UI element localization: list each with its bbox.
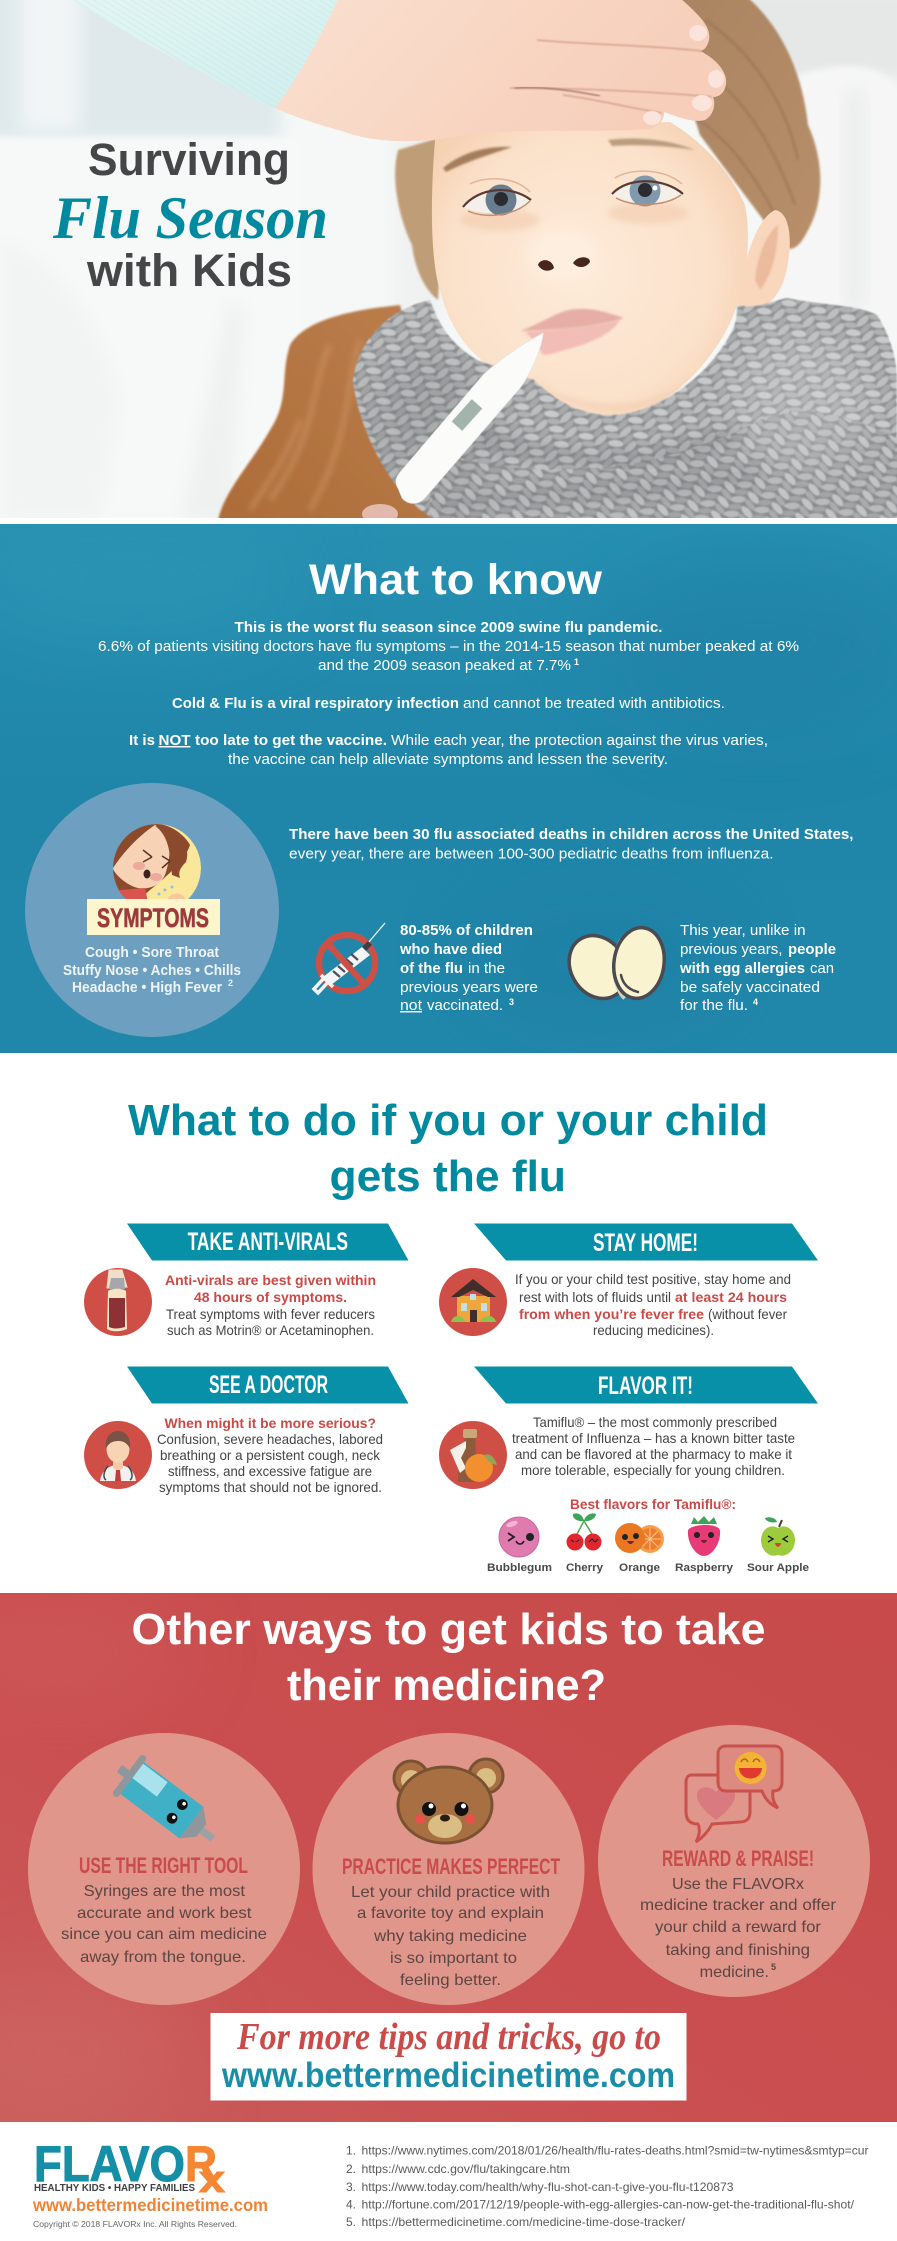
text block: see a doctor: When might it be more serious?	[164, 1415, 376, 1431]
hero title: Surviving	[88, 134, 290, 185]
flavor labels	[487, 1562, 809, 1574]
panel: reward and praise	[598, 1725, 870, 1997]
flavor labels: Bubblegum	[487, 1562, 552, 1574]
nose	[532, 234, 588, 272]
banner: see a doctor: SEE A DOCTOR	[209, 1371, 328, 1399]
text block: not vaccinated: in the	[468, 961, 505, 977]
banner: stay home: STAY HOME!	[593, 1229, 698, 1257]
body text: medicine tracker and offer	[640, 1897, 837, 1914]
text block: worst flu season: 1	[574, 657, 579, 667]
text block: worst flu season: 6.6% of patients visiting doctors have flu symptoms – in the 2014-15 season that number peaked at 6%	[98, 639, 799, 655]
text block: pediatric deaths: There have been 30 flu associated deaths in children across the United States,	[289, 827, 854, 843]
body text: Use the FLAVORx	[672, 1876, 804, 1893]
text block: not vaccinated: vaccinated.	[427, 998, 503, 1014]
parent's hand on forehead	[275, 0, 726, 141]
long ginger hair	[218, 305, 450, 520]
under-eye shadows	[460, 209, 540, 231]
icon: house	[439, 1268, 507, 1336]
knitted scarf	[353, 298, 897, 520]
symptoms label: SYMPTOMS	[97, 903, 209, 933]
icon: flavored bottle with orange	[439, 1421, 507, 1489]
panel: what to do	[84, 1096, 818, 1574]
symptoms list	[63, 945, 241, 996]
text block: vaccine: NOT	[158, 733, 191, 749]
parent's sleeve	[65, 0, 345, 108]
text block: cold and flu: Cold & Flu is a viral respiratory infection	[172, 696, 459, 712]
text block: egg allergies: people	[788, 942, 836, 958]
references list: https://www.nytimes.com/2018/01/26/health/flu-rates-deaths.html?smid=tw-nytimes&smtyp=cur	[362, 2144, 868, 2158]
flavor labels: Sour Apple	[747, 1562, 809, 1574]
references list: https://www.today.com/health/why-flu-shot-can-t-give-you-flu-t120873	[362, 2180, 734, 2194]
panel: right tool	[28, 1733, 300, 2005]
hair on the head	[682, 0, 822, 250]
text block: vaccine: the vaccine can help alleviate symptoms and lessen the severity.	[228, 752, 668, 768]
text block: cold and flu: and cannot be treated with antibiotics.	[463, 696, 725, 712]
body text: is so important to	[390, 1950, 517, 1967]
panel: symptoms circle	[25, 783, 279, 1037]
text block: see a doctor: symptoms that should not be ignored.	[159, 1479, 382, 1495]
skin at bottom edge	[362, 504, 398, 518]
title: USE THE RIGHT TOOL	[79, 1853, 248, 1878]
flavor labels: Orange	[619, 1562, 660, 1574]
heading	[128, 1096, 768, 1201]
symptoms label	[87, 899, 220, 935]
icon: doctor	[84, 1421, 152, 1489]
references list: 1.	[346, 2144, 356, 2158]
references list: 4.	[346, 2198, 356, 2212]
right eye	[612, 171, 683, 206]
body text: Syringes are the most	[84, 1883, 246, 1900]
flavor labels: Cherry	[566, 1562, 604, 1574]
heading: gets the flu	[330, 1152, 566, 1201]
text block: egg allergies: with egg allergies	[679, 961, 805, 977]
text block: not vaccinated: not	[400, 998, 422, 1014]
banner: flavor it	[474, 1366, 818, 1404]
banner: flavor it: FLAVOR IT!	[598, 1372, 693, 1400]
references list: 2.	[346, 2162, 356, 2176]
icon: syringe	[104, 1748, 228, 1859]
symptoms list: 2	[228, 978, 233, 988]
icon: sour apple	[761, 1517, 795, 1556]
icon: teddy bear	[394, 1759, 503, 1843]
left eye	[463, 179, 531, 216]
text block: not vaccinated: 3	[509, 997, 514, 1007]
heading: What to do if you or your child	[128, 1096, 768, 1145]
hero title: with Kids	[86, 245, 292, 296]
icon: crossed-out syringe	[314, 923, 385, 993]
callout: more tips: www.bettermedicinetime.com	[221, 2056, 675, 2095]
text block: worst flu season: This is the worst flu season since 2009 swine flu pandemic.	[234, 620, 662, 636]
text block: anti-virals: Treat symptoms with fever reducers	[166, 1306, 375, 1322]
text block: anti-virals	[165, 1272, 376, 1338]
text block: not vaccinated: 80-85% of children	[400, 923, 533, 939]
callout: more tips	[210, 2013, 686, 2100]
text block: anti-virals: such as Motrin® or Acetaminophen.	[167, 1322, 374, 1338]
logo: FLAVORx: HEALTHY KIDS • HAPPY FAMILIES	[34, 2182, 195, 2194]
text block: not vaccinated: previous years were	[400, 980, 538, 996]
references list: https://bettermedicinetime.com/medicine-time-dose-tracker/	[362, 2215, 686, 2229]
panel: practice makes perfect	[312, 1733, 584, 2005]
text block: pediatric deaths	[289, 827, 854, 862]
icon: medicine bottle	[84, 1268, 152, 1336]
icon: cherry	[566, 1513, 602, 1550]
body text	[351, 1884, 550, 1989]
text block: flavor it: treatment of Influenza – has a known bitter taste	[512, 1430, 795, 1446]
symptoms list: Headache • High Fever	[72, 980, 222, 996]
text block: worst flu season: and the 2009 season peaked at 7.7%	[318, 658, 571, 674]
text block: stay home: reducing medicines).	[593, 1322, 714, 1338]
body text: why taking medicine	[373, 1928, 527, 1945]
body text: away from the tongue.	[80, 1949, 246, 1966]
text block: vaccine: too late to get the vaccine.	[195, 733, 387, 749]
heading: their medicine?	[287, 1661, 606, 1710]
text block: flavor it: and can be flavored at the pharmacy to make it	[515, 1446, 792, 1462]
text block: not vaccinated: who have died	[399, 942, 502, 958]
body text: your child a reward for	[655, 1919, 822, 1936]
text block: egg allergies: This year, unlike in	[680, 923, 806, 939]
banner: stay home	[474, 1224, 818, 1260]
symptoms list: Cough • Sore Throat	[85, 945, 219, 961]
icon: speech bubbles	[686, 1746, 782, 1842]
hero title	[52, 134, 328, 296]
text block: stay home: from when you’re fever free	[519, 1306, 704, 1322]
banner: take anti-virals	[127, 1224, 408, 1260]
body text: 5	[771, 1962, 776, 1972]
text block: see a doctor: Confusion, severe headaches, labored	[157, 1431, 383, 1447]
text block: pediatric deaths: every year, there are between 100-300 pediatric deaths from influenza.	[289, 846, 774, 862]
flavor labels: Raspberry	[675, 1562, 734, 1574]
text block: see a doctor	[157, 1415, 383, 1495]
panel: what to know	[0, 520, 897, 1053]
icon: orange	[615, 1523, 664, 1553]
text block: stay home: If you or your child test positive, stay home and	[515, 1271, 791, 1287]
flavors heading: Best flavors for Tamiflu®:	[570, 1496, 736, 1512]
chin shadow	[549, 384, 686, 410]
text block: stay home: at least 24 hours	[675, 1289, 787, 1305]
hero title: Flu Season	[52, 185, 328, 251]
banner: take anti-virals: TAKE ANTI-VIRALS	[188, 1228, 348, 1256]
text block: egg allergies: previous years,	[680, 942, 782, 958]
body text	[640, 1876, 837, 1981]
body text: since you can aim medicine	[61, 1926, 267, 1943]
text block: flavor it: Tamiflu® – the most commonly prescribed	[533, 1414, 777, 1430]
text block: egg allergies: be safely vaccinated	[680, 980, 820, 996]
heading: Other ways to get kids to take	[132, 1605, 766, 1654]
logo: FLAVORx: FLAVO	[34, 2136, 185, 2192]
symptoms list: Stuffy Nose • Aches • Chills	[63, 963, 241, 979]
icon: eggs	[558, 924, 669, 1009]
references list: http://fortune.com/2017/12/19/people-with-egg-allergies-can-now-get-the-traditional-flu-shot/	[362, 2198, 855, 2212]
text block: egg allergies: 4	[753, 997, 758, 1007]
icon: bubblegum	[499, 1517, 539, 1557]
footer website: www.bettermedicinetime.com	[32, 2195, 268, 2215]
text block: egg allergies: can	[810, 961, 834, 977]
text block: not vaccinated: of the flu	[400, 961, 463, 977]
text block: stay home	[515, 1271, 791, 1338]
red watercolor background	[0, 1593, 897, 2130]
logo: FLAVORx: R	[185, 2136, 217, 2192]
text block: egg allergies: for the flu.	[680, 998, 748, 1014]
body text	[61, 1883, 267, 1966]
text block: vaccine	[129, 733, 768, 768]
title: PRACTICE MAKES PERFECT	[342, 1854, 560, 1879]
text block: vaccine: It is	[129, 733, 155, 749]
text block: cold and flu	[172, 696, 725, 712]
lips	[520, 309, 624, 355]
title: REWARD & PRAISE!	[662, 1846, 814, 1871]
thermometer	[396, 333, 543, 503]
ear	[737, 210, 790, 310]
heading	[132, 1605, 766, 1710]
text block: flavor it: more tolerable, especially for young children.	[521, 1462, 785, 1478]
body text: taking and finishing	[666, 1942, 810, 1959]
icon: coughing child	[113, 824, 201, 899]
text block: flavor it	[512, 1414, 795, 1478]
face	[432, 122, 748, 416]
text block: stay home: rest with lots of fluids until	[519, 1289, 671, 1305]
body text: medicine.	[700, 1964, 769, 1981]
watercolor blue background	[0, 520, 897, 1053]
icon: raspberry	[688, 1516, 720, 1556]
body text: accurate and work best	[77, 1905, 252, 1922]
logo: FLAVORx: x	[199, 2159, 225, 2201]
text block: egg allergies	[679, 923, 836, 1014]
references list: https://www.cdc.gov/flu/takingcare.htm	[362, 2162, 570, 2176]
text block: stay home: (without fever	[708, 1306, 787, 1322]
body text: a favorite toy and explain	[357, 1905, 544, 1922]
references list: 5.	[346, 2215, 356, 2229]
eyebrows	[443, 147, 512, 172]
panel: other ways	[0, 1593, 897, 2130]
text block: see a doctor: breathing or a persistent cough, neck	[160, 1447, 381, 1463]
callout: more tips: For more tips and tricks, go to	[236, 2016, 661, 2058]
hero photo: sick child with thermometer	[0, 0, 897, 538]
banner: see a doctor	[127, 1366, 408, 1404]
body text: Let your child practice with	[351, 1884, 550, 1901]
body text: feeling better.	[400, 1972, 501, 1989]
heading: What to know	[309, 556, 603, 604]
text block: not vaccinated	[399, 923, 538, 1014]
text block: anti-virals: Anti-virals are best given within	[165, 1272, 376, 1288]
text block: see a doctor: stiffness, and excessive fatigue are	[168, 1463, 372, 1479]
text block: vaccine: While each year, the protection against the virus varies,	[391, 733, 768, 749]
references list: 3.	[346, 2180, 356, 2194]
copyright: Copyright © 2018 FLAVORx Inc. All Rights Reserved.	[33, 2219, 237, 2229]
text block: worst flu season	[98, 620, 799, 674]
text block: anti-virals: 48 hours of symptoms.	[194, 1289, 347, 1305]
references list	[346, 2144, 868, 2229]
